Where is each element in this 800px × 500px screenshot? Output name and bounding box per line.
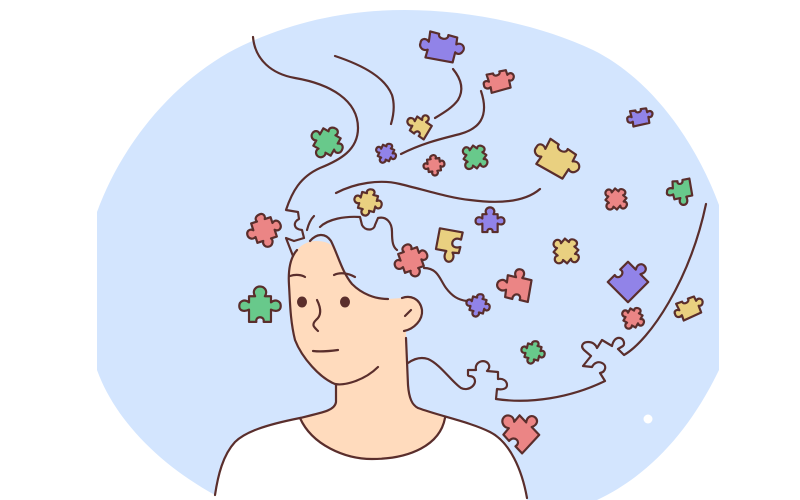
- piece: yellow cross: [545, 231, 587, 272]
- piece: violet top: [418, 30, 466, 64]
- strand 3: [435, 69, 461, 118]
- right eyebrow: [334, 273, 355, 277]
- piece: yellow large: [529, 135, 585, 183]
- puzzle pieces: [239, 30, 707, 454]
- hair line: [310, 235, 388, 299]
- ear: [402, 297, 422, 331]
- piece: red top: [481, 67, 517, 95]
- shoulder and neck left: [215, 385, 336, 495]
- thought strands: [253, 37, 706, 401]
- left eye: [297, 296, 307, 308]
- neck strand with puzzle outlines: [408, 204, 706, 401]
- piece: red bottom: [494, 402, 546, 454]
- piece: yellow corner: [435, 228, 463, 263]
- piece: red right: [598, 182, 633, 217]
- short strand: [307, 216, 314, 230]
- piece: yellow hair: [351, 186, 385, 219]
- background blob: [97, 10, 719, 500]
- piece: red lower right: [617, 302, 649, 334]
- piece: red tiny: [422, 154, 446, 177]
- piece: violet right: [625, 106, 655, 128]
- face outline: [289, 250, 378, 384]
- strand 4: [401, 91, 484, 154]
- shirt: [215, 418, 527, 500]
- piece: green mid: [456, 138, 494, 176]
- strand 5: [336, 182, 540, 202]
- left eyebrow: [290, 275, 305, 277]
- piece: green right: [666, 178, 693, 206]
- person: [215, 235, 527, 500]
- piece: red centre: [390, 239, 433, 282]
- piece: green left: [239, 286, 281, 322]
- mouth: [313, 350, 338, 351]
- piece: green small: [518, 338, 547, 367]
- piece: red middle: [495, 267, 533, 302]
- right eye: [340, 296, 350, 308]
- piece: yellow far right: [671, 293, 707, 324]
- piece: green: [304, 120, 350, 165]
- white dot: [644, 414, 652, 424]
- strand 2: [335, 56, 394, 124]
- piece: violet centre: [476, 207, 504, 232]
- piece: violet tiny: [372, 140, 400, 167]
- strand 7: [424, 268, 467, 301]
- nose: [313, 300, 320, 331]
- piece: red left: [242, 209, 286, 252]
- piece: yellow small: [403, 109, 435, 140]
- skin: [289, 241, 445, 459]
- neckline: [300, 418, 445, 459]
- shoulder and neck right: [406, 338, 527, 498]
- long strand with puzzle outline: [253, 37, 358, 256]
- strand 6 with notch: [320, 217, 397, 250]
- piece: violet diamond: [608, 256, 654, 302]
- piece: violet strand end: [463, 291, 492, 320]
